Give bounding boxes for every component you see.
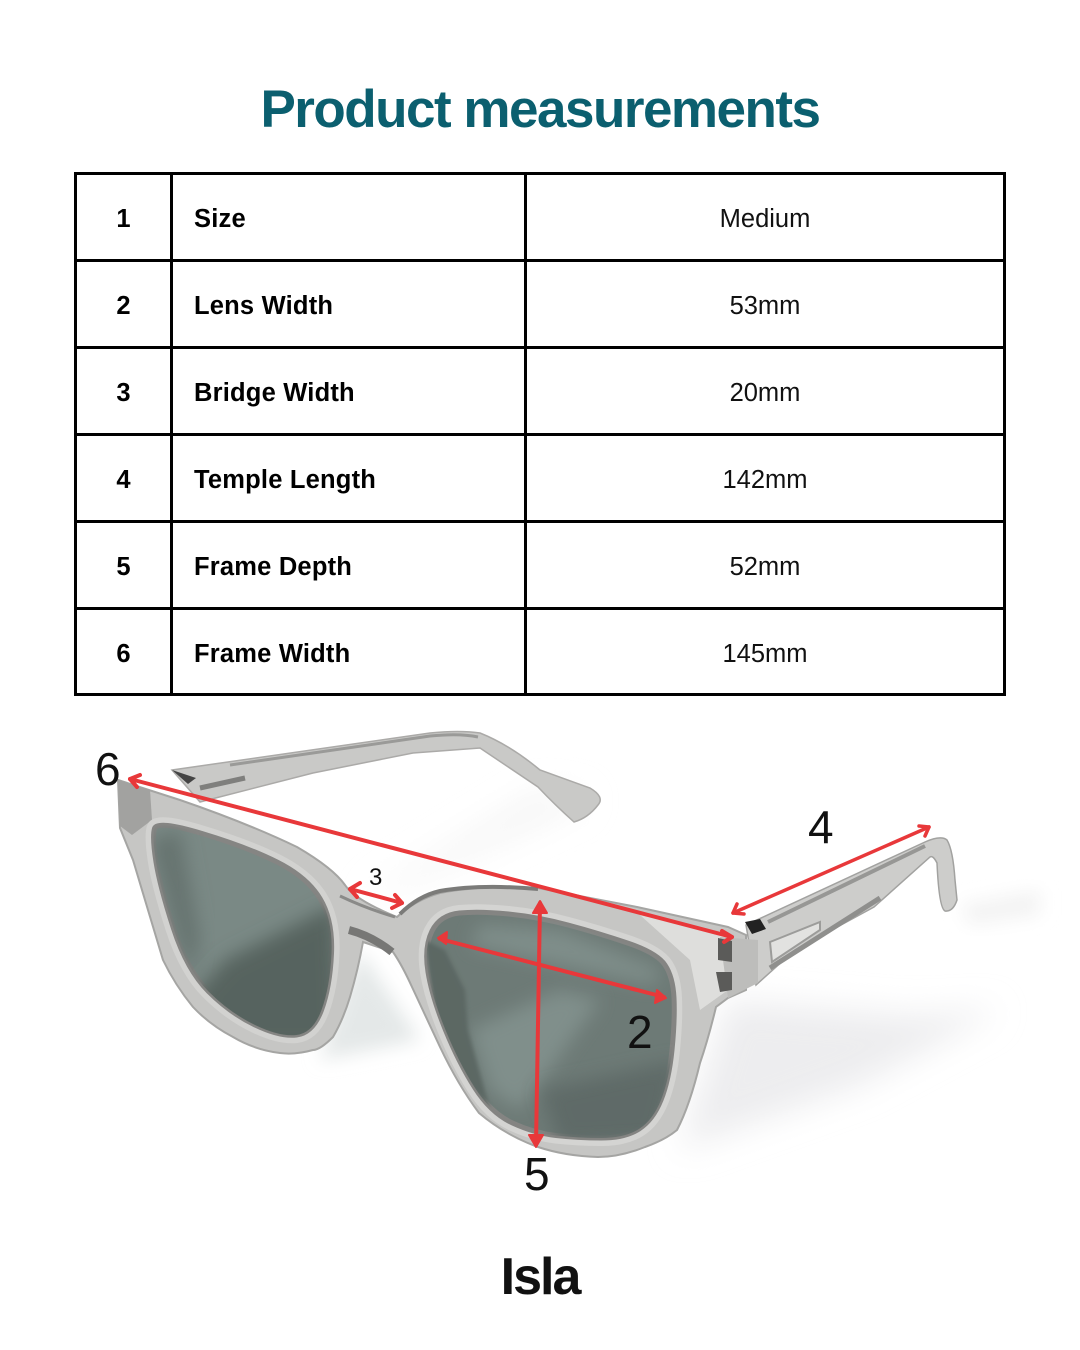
arrow labels: 6 — [95, 743, 121, 795]
arrow labels: 3 — [369, 864, 382, 891]
row: lens width: 2 — [116, 292, 131, 320]
row: bridge width: 20mm — [730, 379, 800, 407]
left lens — [150, 825, 340, 1050]
arrow labels: 4 — [808, 801, 834, 853]
frame — [118, 780, 758, 1157]
row: frame width — [116, 640, 808, 668]
arrow: lens width — [438, 932, 666, 1003]
row: temple length: Temple Length — [194, 466, 376, 494]
product name: Isla — [501, 1248, 579, 1306]
row: lens width: Lens Width — [194, 292, 333, 320]
row: size: Size — [194, 205, 246, 233]
arrow labels: 5 — [524, 1148, 550, 1200]
row: frame depth: 5 — [116, 553, 131, 581]
row: frame depth: Frame Depth — [194, 553, 352, 581]
far temple — [172, 732, 600, 822]
row: frame width: Frame Width — [194, 640, 350, 668]
row: temple length: 142mm — [722, 466, 808, 494]
arrow: frame depth — [529, 901, 547, 1147]
row: bridge width: Bridge Width — [194, 379, 355, 407]
arrow labels: 2 — [627, 1006, 653, 1058]
row: frame depth: 52mm — [730, 553, 800, 581]
row: size: Medium — [720, 205, 810, 233]
row: frame width: 6 — [116, 640, 131, 668]
row: size — [116, 205, 810, 233]
row: temple length — [116, 466, 808, 494]
row: temple length: 4 — [116, 466, 131, 494]
near temple — [745, 838, 957, 985]
row: frame depth — [116, 553, 800, 581]
row: bridge width: 3 — [116, 379, 131, 407]
row: size: 1 — [116, 205, 131, 233]
sunglasses diagram with measurement arrows — [95, 730, 1032, 1200]
measurements table — [74, 172, 1006, 696]
arrow: bridge width — [350, 883, 402, 908]
row: bridge width — [116, 379, 800, 407]
row: frame width: 145mm — [722, 640, 808, 668]
shadows — [320, 790, 1040, 1150]
row: lens width: 53mm — [730, 292, 800, 320]
arrow labels — [95, 743, 834, 1200]
arrow: frame width — [130, 775, 732, 942]
title: Product measurements — [260, 80, 820, 139]
arrow: temple length — [733, 826, 929, 914]
row: lens width — [116, 292, 800, 320]
right lens — [425, 912, 680, 1145]
